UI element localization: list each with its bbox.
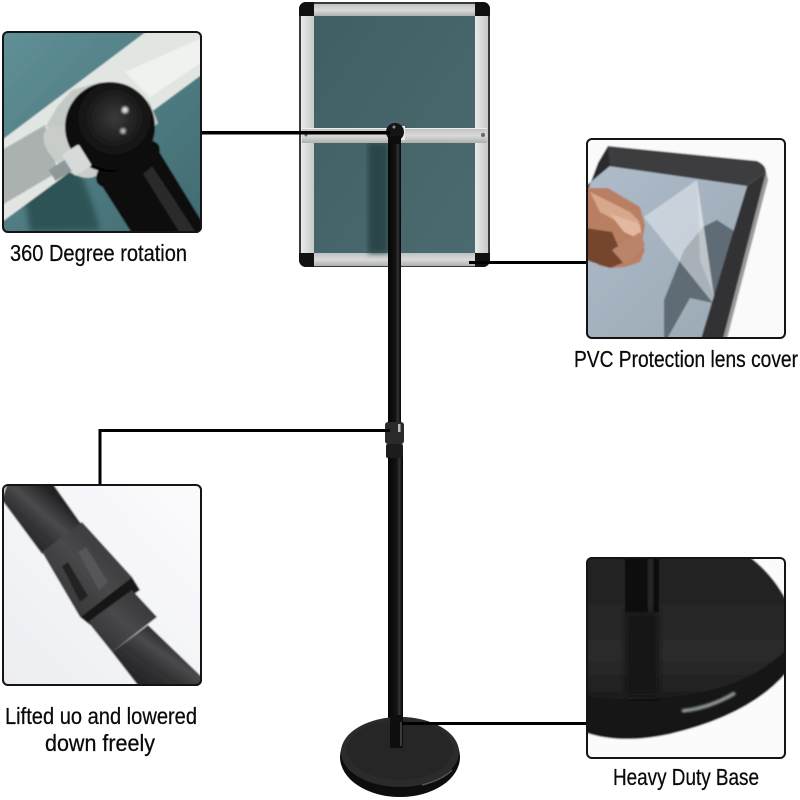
leader line: height adjustment (100, 430, 390, 484)
caption: lifted and lowered, line one and two: down freely (45, 730, 155, 756)
horizontal bracket bar (302, 128, 487, 143)
height adjustment coupler (385, 422, 404, 458)
caption: 360 degree rotation: 360 Degree rotation (10, 240, 187, 266)
swivel joint (386, 123, 405, 144)
panel: 360 degree rotation (2, 31, 204, 235)
caption: lifted and lowered, line one and two: Lifted uo and lowered (5, 703, 197, 729)
leader line: rotation (202, 131, 390, 134)
poster stand product (299, 2, 490, 797)
panel: heavy duty base (584, 555, 786, 759)
round base (340, 715, 460, 797)
pole upper section (388, 140, 401, 424)
panel: PVC protection lens cover (586, 138, 786, 339)
poster frame (299, 2, 490, 267)
leader line: lens cover (469, 261, 586, 264)
panel: lifted up and lowered (2, 484, 204, 688)
leader line: base (402, 722, 586, 725)
caption: heavy duty base: Heavy Duty Base (613, 764, 759, 790)
pole lower section (388, 456, 403, 721)
